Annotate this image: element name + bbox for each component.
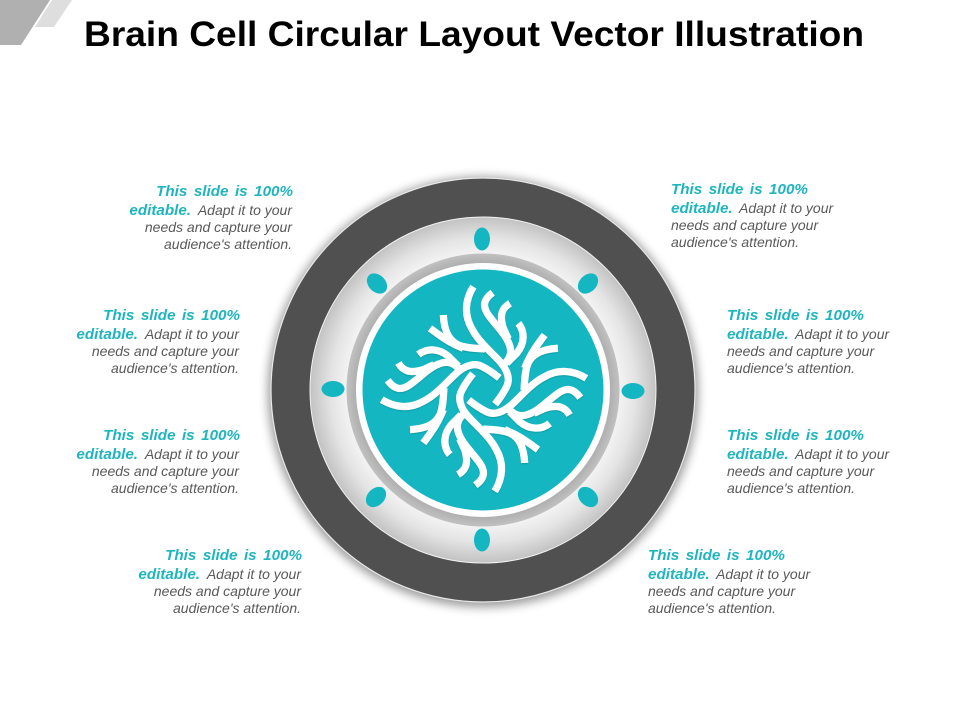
grey ring (346, 254, 620, 526)
text block: lower right outer: This slide is 100% (648, 547, 785, 564)
corner decoration (0, 0, 72, 45)
text block: lower right inner: editable. (727, 446, 789, 463)
text block: upper right outer: needs and capture your (671, 217, 819, 233)
text block: upper right outer: editable. (671, 200, 733, 217)
text block: lower left inner: editable. (76, 446, 138, 463)
text block: lower right outer (648, 547, 812, 616)
text block: upper right inner: audience's attention. (727, 360, 855, 376)
text block: upper left inner: needs and capture your (92, 343, 240, 359)
text block: lower left inner (76, 427, 240, 496)
text block: upper left outer: editable. (129, 202, 191, 219)
text block: upper right inner: This slide is 100% (727, 307, 864, 324)
gradient inner ring (310, 217, 656, 563)
text block: lower right outer: needs and capture your (648, 583, 796, 599)
outer ring shadow (268, 177, 698, 607)
text block: lower right outer: editable. (648, 566, 710, 583)
text block: lower right outer: audience's attention. (648, 600, 776, 616)
text block: upper left outer: This slide is 100% (156, 183, 293, 200)
text block: lower left outer: editable. (138, 566, 200, 583)
circular brain cell diagram (268, 177, 698, 607)
text block: upper right inner: Adapt it to your (794, 326, 891, 342)
text block: lower right inner: audience's attention. (727, 480, 855, 496)
text block: lower right inner (727, 427, 891, 496)
text block: upper left inner: editable. (76, 326, 138, 343)
text block: lower left inner: audience's attention. (111, 480, 239, 496)
text block: upper right outer: audience's attention. (671, 234, 799, 250)
text block: lower right inner: Adapt it to your (794, 446, 891, 462)
text block: lower right inner: This slide is 100% (727, 427, 864, 444)
text block: lower left outer (138, 547, 302, 616)
white ring (356, 263, 610, 517)
text block: upper right outer (671, 181, 835, 250)
text block: upper left outer: needs and capture your (145, 219, 293, 235)
text block: upper right inner (727, 307, 891, 376)
text block: upper left outer (129, 183, 293, 252)
text block: upper right outer: This slide is 100% (671, 181, 808, 198)
text block: upper left inner (76, 307, 240, 376)
text block: lower left inner: needs and capture your (92, 463, 240, 479)
text block: lower left outer: needs and capture your (154, 583, 302, 599)
text block: upper left inner: Adapt it to your (144, 326, 240, 342)
text block: upper left outer: audience's attention. (164, 236, 292, 252)
dark outer ring (271, 178, 695, 602)
text block: upper left outer: Adapt it to your (197, 202, 293, 218)
text block: lower left inner: This slide is 100% (103, 427, 240, 444)
text block: upper right inner: needs and capture your (727, 343, 875, 359)
teal core (362, 270, 604, 510)
text block: upper right outer: Adapt it to your (738, 200, 835, 216)
text block: upper right inner: editable. (727, 326, 789, 343)
teal dots (322, 228, 644, 552)
title: Brain Cell Circular Layout Vector Illustration (84, 15, 864, 54)
brain cell shadow (382, 288, 586, 492)
brain cell branches (382, 287, 586, 491)
text block: upper left inner: This slide is 100% (103, 307, 240, 324)
text block: lower right outer: Adapt it to your (715, 566, 812, 582)
text block: lower left outer: Adapt it to your (206, 566, 302, 582)
text block: lower left outer: audience's attention. (173, 600, 301, 616)
text block: upper left inner: audience's attention. (111, 360, 239, 376)
text block: lower left inner: Adapt it to your (144, 446, 240, 462)
text block: lower left outer: This slide is 100% (165, 547, 302, 564)
text block: lower right inner: needs and capture your (727, 463, 875, 479)
